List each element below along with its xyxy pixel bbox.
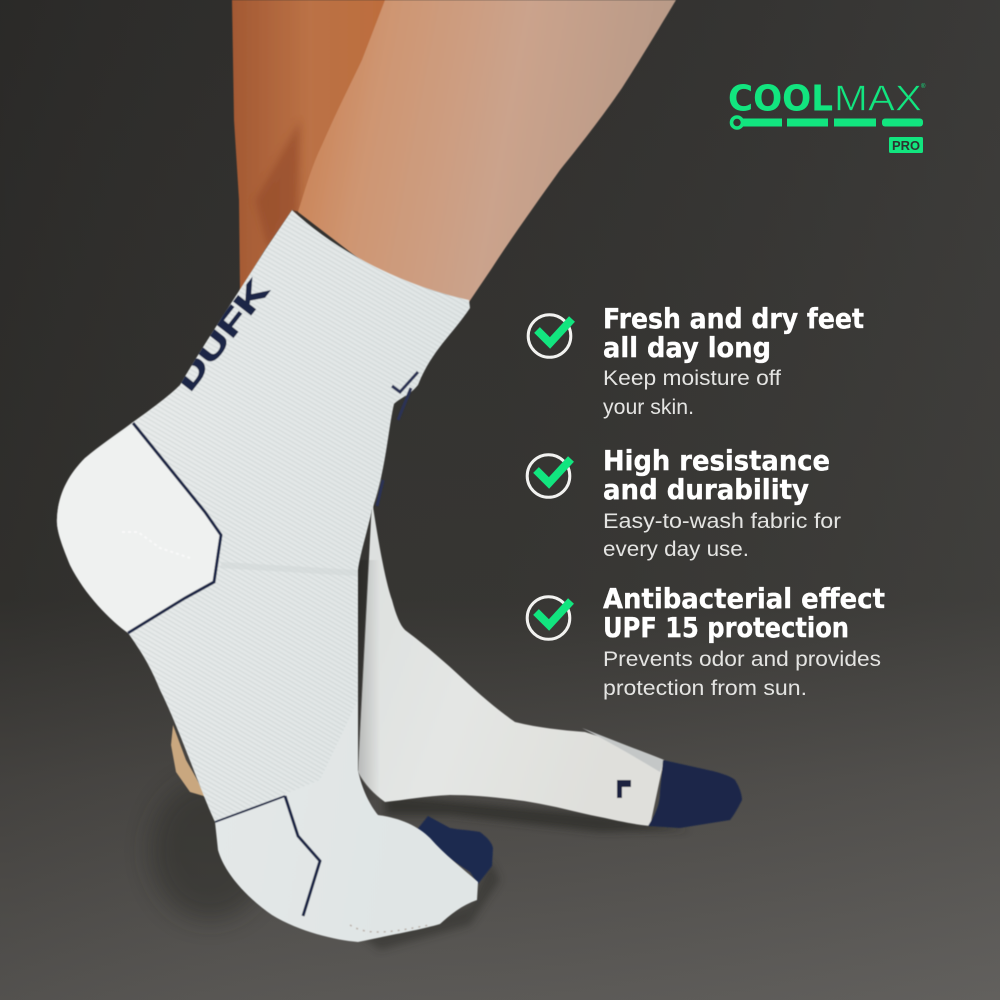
icon: check	[527, 597, 571, 639]
heading: Fresh and dry feet	[603, 303, 864, 335]
photo: front navy toe	[412, 816, 493, 884]
logo: Coolmax Pro	[728, 78, 926, 153]
benefit: fresh and dry: your skin.	[603, 395, 694, 419]
benefit: fresh and dry: all day long	[603, 332, 771, 364]
rear sock shaded edge	[358, 560, 380, 800]
benefit: high resistance	[527, 445, 841, 561]
heading: High resistance	[603, 445, 830, 477]
sock right-side marks	[377, 372, 418, 506]
logo thread bar	[732, 117, 923, 128]
back leg	[232, 0, 388, 292]
heel shading	[57, 424, 221, 633]
logo pro badge: PRO	[892, 138, 920, 153]
photo: legs	[232, 0, 676, 302]
front leg	[298, 0, 676, 302]
floor shadow: front foot	[150, 780, 270, 920]
benefit: antibacterial	[527, 583, 885, 700]
photo: rear sock	[358, 500, 742, 828]
icon: check	[528, 315, 572, 357]
benefit: high resistance: and durability	[603, 474, 809, 506]
benefit: antibacterial: protection from sun.	[603, 676, 807, 700]
knit texture	[128, 210, 470, 822]
toe stitching	[350, 925, 430, 932]
sock fold shadow	[220, 562, 358, 576]
benefit: high resistance: every day use.	[603, 537, 749, 561]
toe navy line	[215, 796, 285, 822]
icon: check	[527, 455, 571, 497]
logo wordmark bold: COOL	[728, 78, 833, 120]
floor shadow: rear foot	[385, 795, 690, 832]
heel navy line	[128, 423, 221, 633]
benefit: fresh and dry	[528, 303, 864, 419]
photo: back heel sliver	[171, 725, 207, 797]
description: Keep moisture off	[603, 366, 781, 390]
sock brand lettering: DUFK	[167, 273, 276, 397]
logo registered mark: ®	[921, 83, 926, 90]
benefit: antibacterial: UPF 15 protection	[603, 612, 849, 644]
photo: front sock	[57, 210, 478, 942]
heel seam	[122, 532, 190, 558]
logo wordmark light: MAX	[834, 78, 922, 118]
rear navy toe	[648, 760, 742, 828]
description: Prevents odor and provides	[603, 647, 881, 671]
description: Easy-to-wash fabric for	[603, 509, 841, 533]
heading: Antibacterial effect	[603, 583, 885, 615]
icon: sock letter mark	[617, 780, 631, 798]
